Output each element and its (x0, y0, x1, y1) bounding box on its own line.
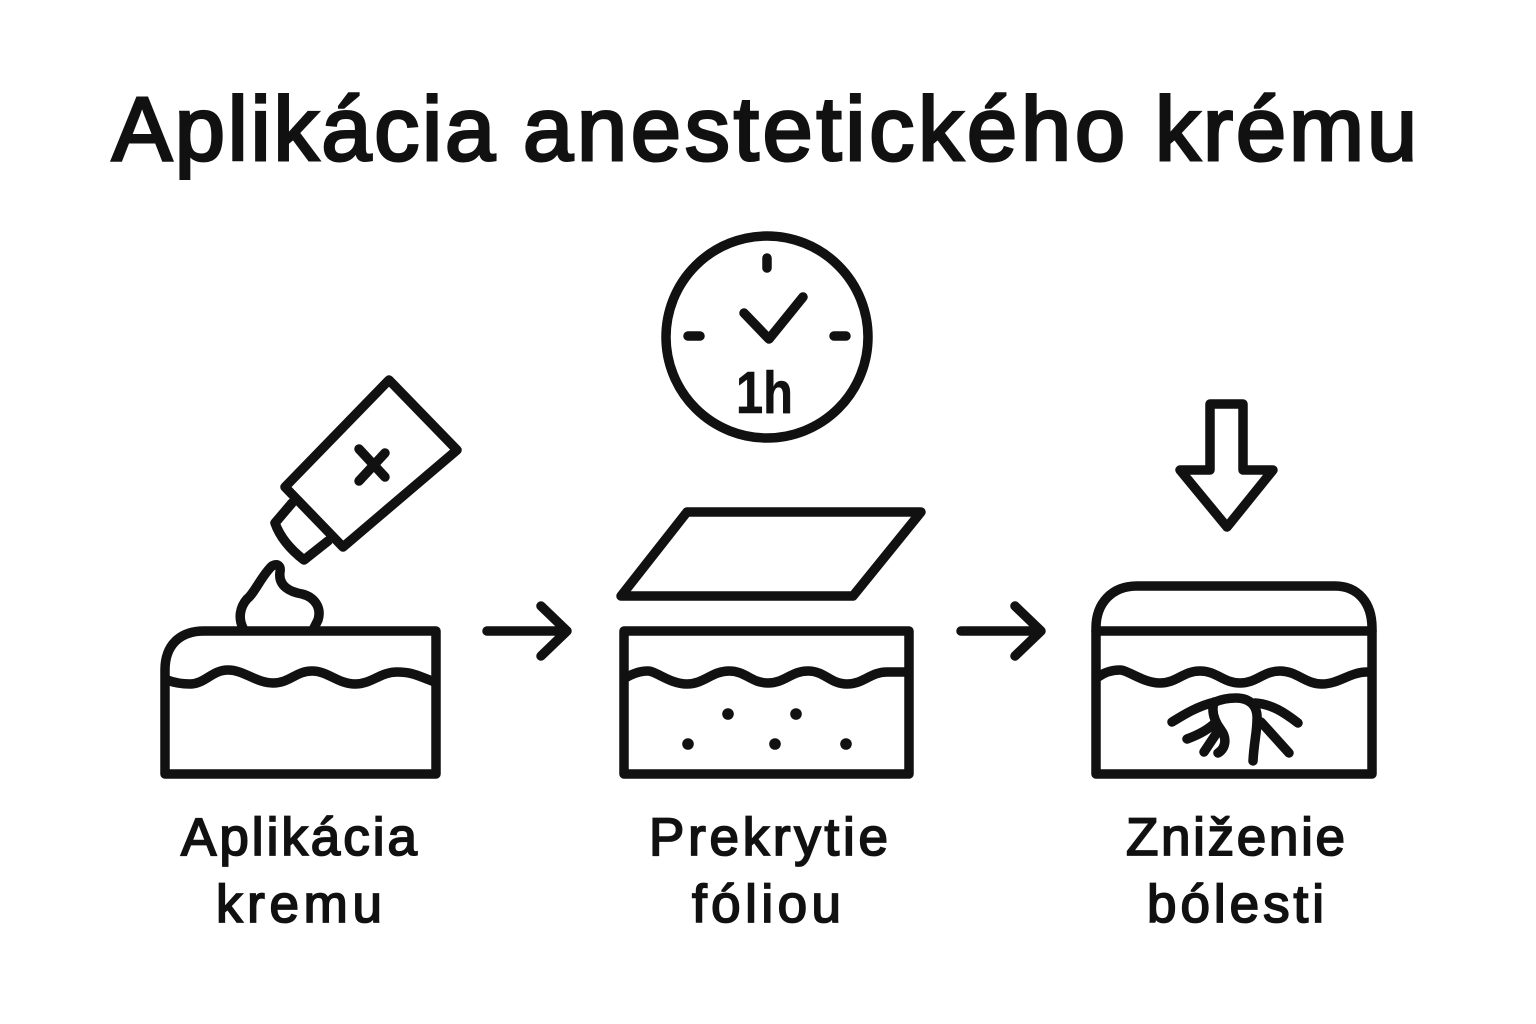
title: Aplikácia (112, 80, 496, 180)
icon: down arrow (1180, 404, 1273, 527)
icon: cream blob (240, 565, 319, 628)
label: step 1: Aplikácia (181, 808, 418, 867)
title: anestetického (523, 80, 1125, 180)
label: step 1 (181, 808, 418, 934)
label: step 2 (649, 808, 888, 934)
icon: skin block with nerve (1096, 586, 1372, 774)
icon: clock (666, 236, 868, 438)
label: step 2: fóliou (692, 875, 841, 934)
icon: cream tube (275, 380, 457, 560)
label: step 2: Prekrytie (649, 808, 888, 867)
arrow: step 1 to step 2 (487, 606, 567, 656)
label: step 3 (1126, 808, 1345, 934)
arrow: step 2 to step 3 (961, 606, 1041, 656)
panel: step 3 pain reduction (1096, 404, 1372, 934)
icon: skin block with dots (624, 631, 909, 774)
icon: foil sheet (621, 512, 921, 596)
panel: step 1 application (165, 380, 457, 934)
icon: clock: 1h (736, 360, 793, 426)
title (112, 80, 1417, 180)
icon: nerve (1172, 698, 1298, 761)
panel: step 2 foil (621, 236, 921, 934)
title: krému (1155, 80, 1417, 180)
label: step 3: bólesti (1147, 875, 1324, 934)
label: step 1: kremu (216, 875, 382, 934)
label: step 3: Zniženie (1126, 808, 1345, 867)
icon: skin block (165, 631, 436, 774)
